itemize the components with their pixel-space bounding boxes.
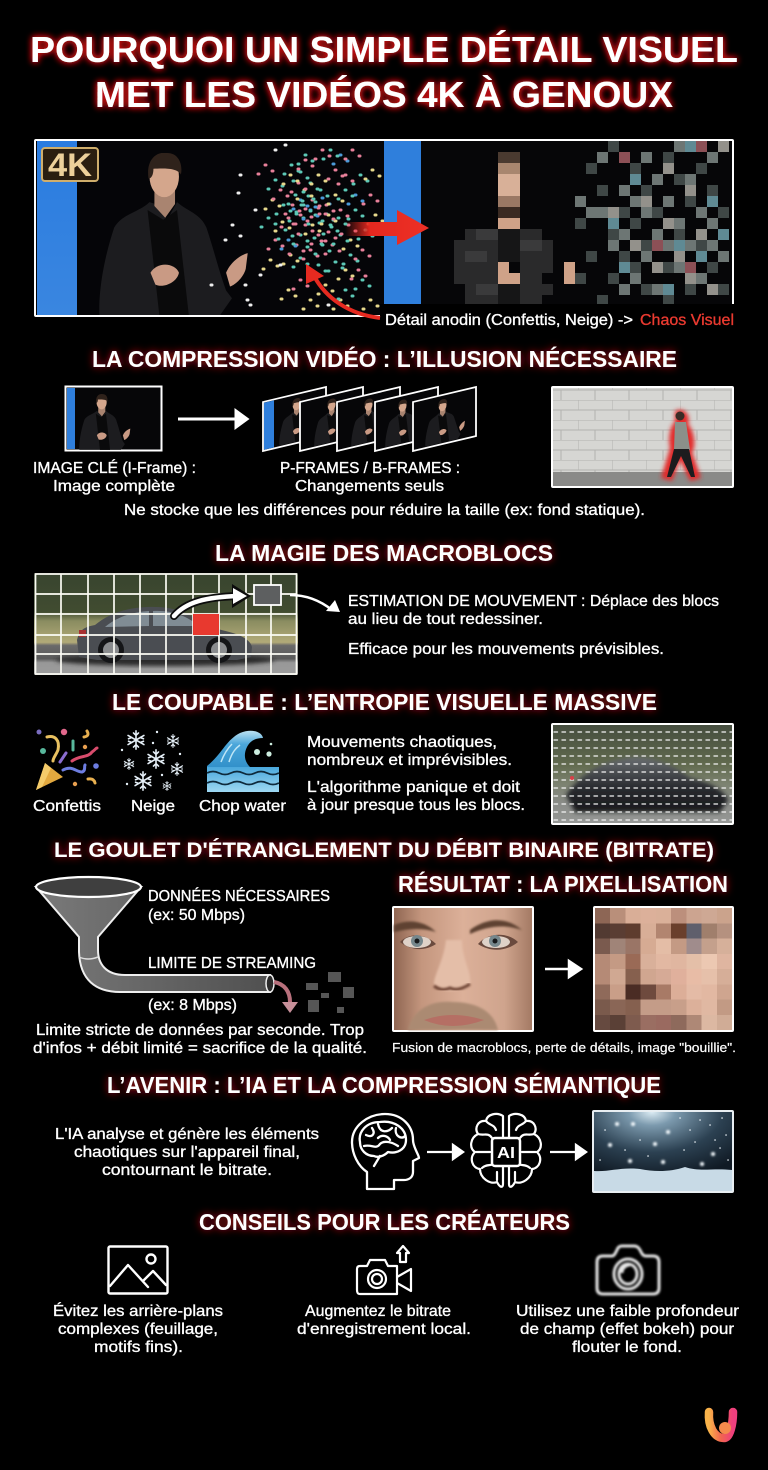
tip: depth of field: Utilisez une faible profondeur bbox=[516, 1303, 740, 1320]
entropy explanation: à jour presque tous les blocs. bbox=[307, 797, 525, 814]
pink overflow arrow bbox=[274, 982, 298, 1013]
heading: bitrate: LE GOULET D'ÉTRANGLEMENT DU DÉBIT BINAIRE (BITRATE) bbox=[54, 837, 714, 862]
heading: compression: LA COMPRESSION VIDÉO : L’ILLUSION NÉCESSAIRE bbox=[92, 345, 677, 372]
icon: confetti bbox=[36, 729, 99, 790]
AI explanation: L'IA analyse et génère les éléments bbox=[55, 1126, 319, 1143]
heading: macroblocs: LA MAGIE DES MACROBLOCS bbox=[215, 540, 553, 566]
AI explanation: chaotiques sur l'appareil final, bbox=[74, 1144, 300, 1161]
tip: background: motifs fins). bbox=[94, 1339, 183, 1356]
macroblock grid over car bbox=[34, 573, 298, 675]
bitrate explanation: Limite stricte de données par seconde. Trop bbox=[36, 1022, 364, 1039]
motion arrow bbox=[174, 584, 251, 616]
icon: blurred camera bbox=[597, 1246, 659, 1294]
tip: bitrate: Augmentez le bitrate bbox=[305, 1303, 451, 1320]
arrow: sharp to pixelated bbox=[545, 961, 581, 977]
arrow: I-frame to P-frames bbox=[178, 411, 247, 427]
arrow: head to AI bbox=[427, 1145, 463, 1159]
P-frame and B-frame stack bbox=[263, 387, 476, 451]
entropy explanation: Mouvements chaotiques, bbox=[307, 734, 497, 751]
title: POURQUOI UN SIMPLE DÉTAIL VISUEL bbox=[30, 29, 738, 70]
icon: AI brain bbox=[471, 1114, 541, 1187]
icon labels: Neige bbox=[131, 798, 175, 815]
heading: pixellisation: RÉSULTAT : LA PIXELLISATION bbox=[398, 870, 728, 897]
I-frame thumbnail bbox=[66, 386, 162, 450]
streaming limit label bbox=[148, 955, 316, 1014]
entropy explanation: L'algorithme panique et doit bbox=[307, 779, 521, 796]
panel: le goulet d'étranglement bbox=[33, 837, 736, 1057]
hero caption: Détail anodin (Confettis, Neige) -> bbox=[385, 312, 633, 329]
tip: depth of field: flouter le fond. bbox=[572, 1339, 682, 1356]
panel: la magie des macroblocs bbox=[34, 540, 719, 675]
AI explanation: contournant le bitrate. bbox=[102, 1162, 272, 1179]
sharp face photo bbox=[392, 906, 534, 1032]
brick wall with walking man bbox=[551, 386, 734, 488]
required data label: (ex: 50 Mbps) bbox=[148, 907, 245, 924]
macroblock explanation: ESTIMATION DE MOUVEMENT : Déplace des blocs bbox=[348, 593, 719, 610]
icon: head with brain bbox=[352, 1114, 419, 1189]
icon: landscape picture bbox=[108, 1246, 168, 1294]
hero caption: Chaos Visuel bbox=[640, 312, 734, 329]
arrow: AI to snow image bbox=[550, 1145, 586, 1159]
streaming limit label: (ex: 8 Mbps) bbox=[148, 997, 237, 1014]
blue stage band, left image bbox=[37, 141, 77, 315]
panel: la compression vidéo bbox=[33, 345, 734, 519]
icon: video camera with up arrow bbox=[357, 1246, 411, 1294]
tip: background bbox=[53, 1301, 223, 1356]
tip: bitrate bbox=[297, 1303, 471, 1338]
pixelation caption: Fusion de macroblocs, perte de détails, image "bouillie". bbox=[392, 1040, 736, 1055]
panel: hero before and after image bbox=[34, 139, 736, 332]
P-frames label bbox=[280, 460, 460, 495]
speaker bbox=[99, 153, 248, 315]
tip: depth of field: de champ (effet bokeh) pour bbox=[520, 1321, 735, 1338]
curved red arrow to confetti bbox=[306, 264, 380, 318]
dropped data pixels bbox=[306, 972, 354, 1013]
icon: logo bbox=[709, 1412, 733, 1438]
tip: background: Évitez les arrière-plans bbox=[53, 1301, 223, 1320]
title bbox=[30, 29, 738, 115]
arrow: grid to explanation bbox=[290, 595, 340, 612]
AI explanation bbox=[55, 1126, 319, 1179]
tip: depth of field bbox=[516, 1303, 740, 1356]
macroblock explanation: au lieu de tout redessiner. bbox=[348, 611, 543, 628]
confetti scatter bbox=[211, 145, 383, 309]
compression note: Ne stocke que les différences pour réduire la taille (ex: fond statique). bbox=[124, 502, 645, 519]
icon labels: Chop water bbox=[199, 798, 287, 815]
red arrow: before to after bbox=[345, 210, 429, 245]
panel: conseils bbox=[53, 1208, 740, 1356]
heading: avenir: L’AVENIR : L’IA ET LA COMPRESSION SÉMANTIQUE bbox=[107, 1071, 661, 1098]
red macroblock bbox=[193, 614, 219, 635]
icon: AI brain: AI bbox=[497, 1145, 515, 1162]
bitrate explanation: d'infos + débit limité = sacrifice de la qualité. bbox=[33, 1040, 367, 1057]
icon labels: Confettis bbox=[33, 798, 101, 815]
streaming limit label: LIMITE DE STREAMING bbox=[148, 955, 316, 972]
tip: background: complexes (feuillage, bbox=[58, 1321, 218, 1338]
I-frame label bbox=[33, 458, 196, 495]
hero caption bbox=[385, 312, 734, 329]
entropy explanation bbox=[307, 734, 525, 814]
moved gray macroblock bbox=[254, 585, 281, 605]
funnel and narrow pipe bbox=[36, 877, 274, 992]
required data label: DONNÉES NÉCESSAIRES bbox=[148, 886, 330, 905]
caption backing bbox=[380, 304, 736, 332]
entropy explanation: nombreux et imprévisibles. bbox=[307, 752, 512, 769]
I-frame label: Image complète bbox=[53, 478, 175, 495]
pixelated image bbox=[384, 141, 732, 304]
heading: entropie: LE COUPABLE : L’ENTROPIE VISUELLE MASSIVE bbox=[112, 689, 657, 715]
macroblock explanation: Efficace pour les mouvements prévisibles. bbox=[348, 641, 664, 658]
panel: l'avenir IA bbox=[55, 1071, 734, 1193]
icon labels bbox=[33, 798, 287, 815]
title: MET LES VIDÉOS 4K À GENOUX bbox=[95, 74, 674, 115]
4K badge: 4K bbox=[48, 147, 92, 183]
P-frames label: P-FRAMES / B-FRAMES : bbox=[280, 460, 460, 477]
motion vector field over blurred car bbox=[551, 723, 734, 825]
I-frame label: IMAGE CLÉ (I-Frame) : bbox=[33, 458, 196, 477]
pixelated face bbox=[593, 906, 734, 1032]
P-frames label: Changements seuls bbox=[295, 478, 444, 495]
macroblock explanation bbox=[348, 593, 719, 658]
tip: bitrate: d'enregistrement local. bbox=[297, 1321, 471, 1338]
required data label bbox=[148, 886, 330, 924]
icon: snowflakes bbox=[121, 731, 183, 791]
icon: chop water wave bbox=[207, 731, 279, 792]
generated snow image bbox=[592, 1110, 734, 1193]
heading: conseils: CONSEILS POUR LES CRÉATEURS bbox=[199, 1208, 570, 1235]
bitrate explanation bbox=[33, 1022, 367, 1057]
panel: l'entropie visuelle bbox=[33, 689, 734, 825]
